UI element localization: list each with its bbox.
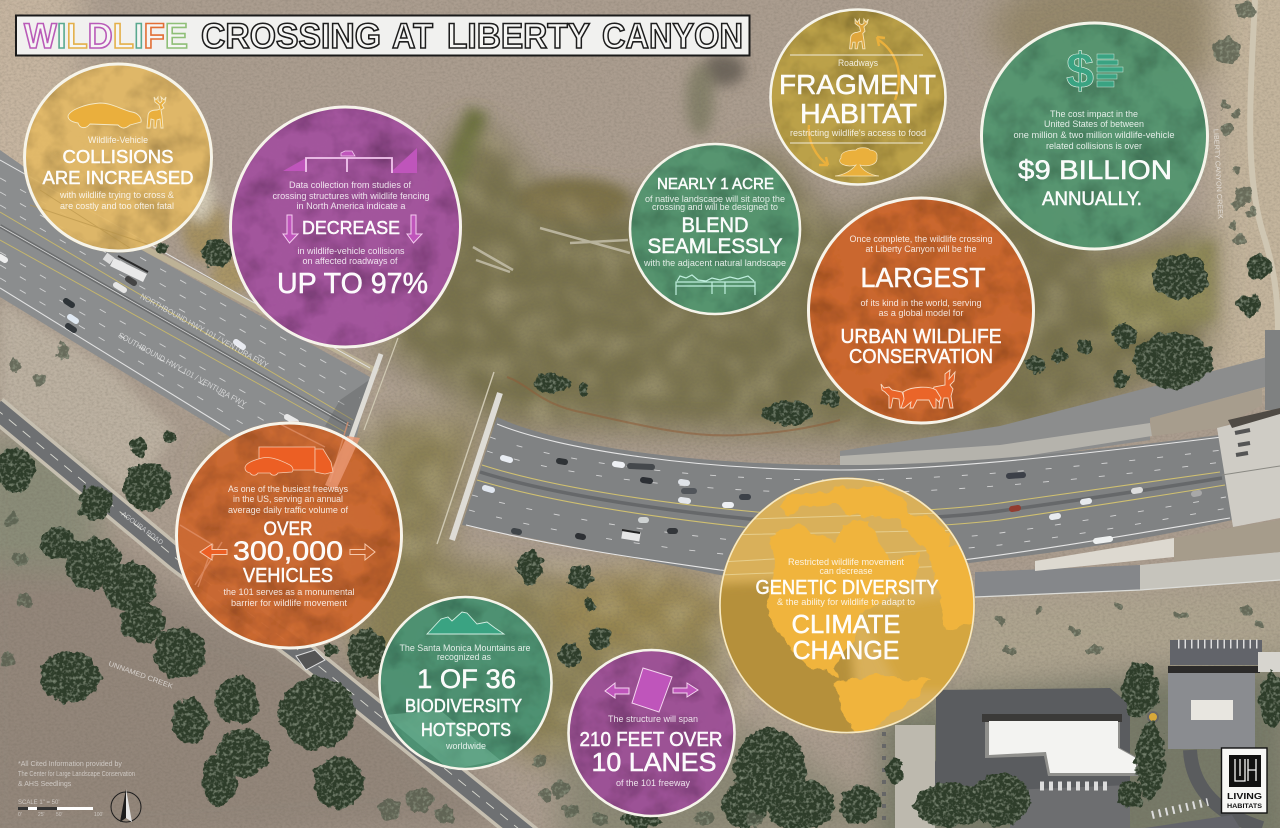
- text: traffic volume: [224, 484, 354, 608]
- text: nearly 1 acre: BLEND: [682, 214, 748, 237]
- text: decrease statistics: on affected roadways of: [302, 256, 398, 266]
- text: traffic volume: average daily traffic volume of: [228, 505, 348, 515]
- road and creek labels: SOUTHBOUND HWY 101 / VENTURA FWY: [117, 331, 248, 409]
- panel: decrease up to 97%: [229, 106, 462, 348]
- crossing abutment walls: [335, 338, 500, 544]
- text: decrease statistics: [272, 180, 430, 300]
- panel: largest urban wildlife conservation: [807, 196, 1035, 424]
- title word: WILDLIFE in rainbow outline: WILDLIFE: [24, 17, 188, 56]
- text: cost impact: $9 BILLION: [1018, 155, 1172, 185]
- text: hotspots: worldwide: [445, 741, 486, 751]
- road and creek labels: AGOURA ROAD: [120, 511, 164, 547]
- text: hotspots: recognized as: [437, 652, 491, 662]
- text: cost impact: related collisions is over: [1046, 141, 1142, 151]
- text: collisions are increased: ARE INCREASED: [42, 167, 194, 188]
- text: fragment habitat: FRAGMENT: [779, 69, 936, 100]
- text: hotspots: The Santa Monica Mountains are: [400, 643, 530, 653]
- icon: right arrow: [350, 544, 375, 560]
- text: largest: URBAN WILDLIFE: [840, 326, 1002, 348]
- road and creek labels: NORTHBOUND HWY 101 / VENTURA FWY: [139, 292, 270, 370]
- title words: CROSSING AT LIBERTY CANYON: LIBERTY: [447, 17, 590, 56]
- scale bar: 100': [94, 812, 103, 818]
- icon: north arrow: [111, 789, 141, 822]
- text: fragment habitat: [779, 58, 936, 138]
- text: largest: as a global model for: [878, 308, 964, 318]
- icon: right down arrow: [407, 215, 422, 243]
- icon: deer: [850, 19, 868, 49]
- text: span: of the 101 freeway: [616, 778, 690, 788]
- icon: car hitting deer: [68, 97, 166, 128]
- truck on freeway: [105, 256, 148, 278]
- text: decrease statistics: crossing structures with wildlife fencing: [272, 191, 430, 201]
- text: climate change: & the ability for wildlife to adapt to: [777, 597, 915, 607]
- logo: Living Habitats: HABITATS: [1227, 803, 1263, 810]
- source note: *All Cited Information provided by: [18, 761, 122, 768]
- text: nearly 1 acre: crossing and will be designed to: [652, 202, 778, 212]
- panel: biodiversity hotspots: [378, 596, 552, 770]
- text: traffic volume: VEHICLES: [243, 565, 333, 587]
- text: largest: Once complete, the wildlife crossing: [850, 234, 992, 244]
- text: traffic volume: the 101 serves as a monumental: [224, 587, 354, 597]
- text: traffic volume: OVER: [264, 519, 312, 540]
- text: nearly 1 acre: of native landscape will sit atop the: [645, 194, 785, 204]
- text: decrease statistics: in North America indicate a: [296, 201, 406, 211]
- text: hotspots: 1 OF 36: [417, 664, 516, 694]
- source note: The Center for Large Landscape Conservation: [18, 771, 135, 778]
- text: collisions are increased: with wildlife trying to cross &: [59, 190, 174, 200]
- pale overpass deck at east end: [1217, 408, 1280, 527]
- text: largest: of its kind in the world, serving: [860, 298, 982, 308]
- text: nearly 1 acre: SEAMLESSLY: [648, 235, 782, 258]
- panel: structure span: [568, 649, 736, 817]
- logo: Living Habitats: [1222, 748, 1267, 813]
- icon: left arrow: [605, 683, 629, 698]
- text: largest: CONSERVATION: [849, 346, 993, 368]
- Agoura Road: [0, 408, 530, 828]
- text: fragment habitat: restricting wildlife's access to food: [790, 128, 926, 138]
- divider rules: [790, 55, 923, 143]
- text: cost impact: The cost impact in the: [1050, 109, 1138, 119]
- text: cost impact: one million & two million wildlife-vehicle: [1014, 130, 1174, 140]
- source note: & AHS Seedlings: [18, 781, 72, 788]
- text: span: The structure will span: [608, 714, 698, 724]
- text: climate change: CLIMATE: [792, 609, 900, 639]
- text: hotspots: [400, 643, 530, 751]
- source note: [18, 761, 135, 788]
- text: climate change: CHANGE: [792, 635, 900, 665]
- text: decrease statistics: in wildlife-vehicle collisions: [298, 246, 405, 256]
- text: cost impact: United States of between: [1044, 119, 1144, 129]
- icon: overpass on hillside: [283, 148, 417, 173]
- road and creek labels: [107, 129, 1223, 691]
- gully streaks: [473, 228, 840, 435]
- icon: fox, bobcat and deer: [881, 370, 955, 408]
- text: climate change: Restricted wildlife movement: [788, 557, 904, 567]
- icon: vegetated bridge: [676, 275, 755, 295]
- scale bar: 50': [56, 812, 63, 818]
- panel: wildlife-vehicle collisions: [23, 62, 213, 252]
- panel: busiest freeway vehicles: [175, 422, 403, 650]
- text: largest: LARGEST: [860, 262, 986, 293]
- freeway: Northbound and Southbound 101 west segment: [0, 150, 378, 512]
- text: collisions are increased: Wildlife-Vehicle: [88, 135, 148, 145]
- panel: nine billion annual cost: [980, 22, 1209, 250]
- text: hotspots: HOTSPOTS: [421, 719, 511, 740]
- buildings and parking, bottom right: [884, 640, 1280, 828]
- text: nearly 1 acre: NEARLY 1 ACRE: [657, 176, 774, 193]
- icon: oak tree: [835, 148, 879, 176]
- text: hotspots: BIODIVERSITY: [405, 695, 522, 716]
- text: climate change: [756, 557, 939, 665]
- title words: CROSSING AT LIBERTY CANYON: CANYON: [602, 17, 743, 56]
- title words: CROSSING AT LIBERTY CANYON: CROSSING: [201, 17, 381, 56]
- text: cost impact: ANNUALLY.: [1042, 189, 1142, 210]
- icon: continents of the globe: [766, 486, 985, 735]
- icon: right arrow: [673, 683, 698, 697]
- dry road at east edge: [1250, 0, 1278, 330]
- text: decrease statistics: Data collection from studies of: [289, 180, 411, 190]
- icon: left arrow: [200, 544, 227, 560]
- scale bar: SCALE 1" = 50': [18, 800, 59, 806]
- scale bar: [18, 800, 103, 818]
- text: nearly 1 acre: with the adjacent natural landscape: [643, 258, 786, 268]
- icon: crossing deck: [632, 668, 672, 712]
- scale bar: 25': [38, 812, 45, 818]
- logo: Living Habitats: LIVING: [1227, 791, 1262, 801]
- title words: CROSSING AT LIBERTY CANYON: [201, 17, 743, 56]
- text: climate change: GENETIC DIVERSITY: [756, 576, 939, 599]
- scale bar: 0': [18, 812, 22, 818]
- tan mottling on vegetated slope: [364, 135, 1210, 748]
- icon: mountains: [427, 612, 504, 634]
- panel: climate change globe: [719, 478, 975, 734]
- icon: dollar sign and bars: $: [1066, 43, 1094, 99]
- panel: roadways fragment habitat: [770, 8, 946, 186]
- text: collisions are increased: COLLISIONS: [62, 146, 174, 167]
- text: decrease statistics: UP TO 97%: [277, 268, 428, 300]
- text: fragment habitat: HABITAT: [800, 98, 917, 129]
- text: traffic volume: in the US, serving an annual: [233, 494, 343, 504]
- freeway: main segment east of crossing: [462, 330, 1280, 581]
- text: decrease statistics: DECREASE: [302, 217, 400, 238]
- text: largest: [840, 234, 1002, 368]
- text: traffic volume: barrier for wildlife movement: [231, 598, 348, 608]
- cars on main freeway: [485, 458, 1199, 541]
- text: nearly 1 acre: [643, 176, 786, 268]
- title banner: [16, 16, 750, 56]
- icon: LH monogram: [1229, 755, 1261, 787]
- text: largest: at Liberty Canyon will be the: [866, 244, 976, 254]
- text: climate change: can decrease: [820, 566, 872, 576]
- icon: dollar sign and bars: [1066, 43, 1123, 99]
- text: cost impact: [1014, 109, 1174, 210]
- icon: left down arrow: [283, 215, 298, 243]
- road and creek labels: UNNAMED CREEK: [107, 661, 174, 691]
- text: fragment habitat: Roadways: [838, 58, 878, 68]
- text: traffic volume: As one of the busiest freeways: [228, 484, 348, 494]
- text: collisions are increased: are costly and too often fatal: [60, 201, 174, 211]
- text: traffic volume: 300,000: [233, 536, 343, 566]
- icon: migration arrows: [809, 37, 899, 165]
- icon: truck and car: [245, 447, 333, 475]
- text: span: [580, 714, 722, 788]
- text: collisions are increased: [42, 135, 194, 211]
- text: span: 10 LANES: [592, 749, 716, 777]
- trees and shrubs: [0, 239, 1280, 828]
- panel: blend seamlessly: [629, 143, 801, 315]
- text: span: 210 FEET OVER: [580, 728, 722, 751]
- frontage road and south embankment: [975, 520, 1280, 597]
- title words: CROSSING AT LIBERTY CANYON: AT: [392, 17, 433, 56]
- road and creek labels: LIBERTY CANYON CREEK: [1212, 129, 1223, 219]
